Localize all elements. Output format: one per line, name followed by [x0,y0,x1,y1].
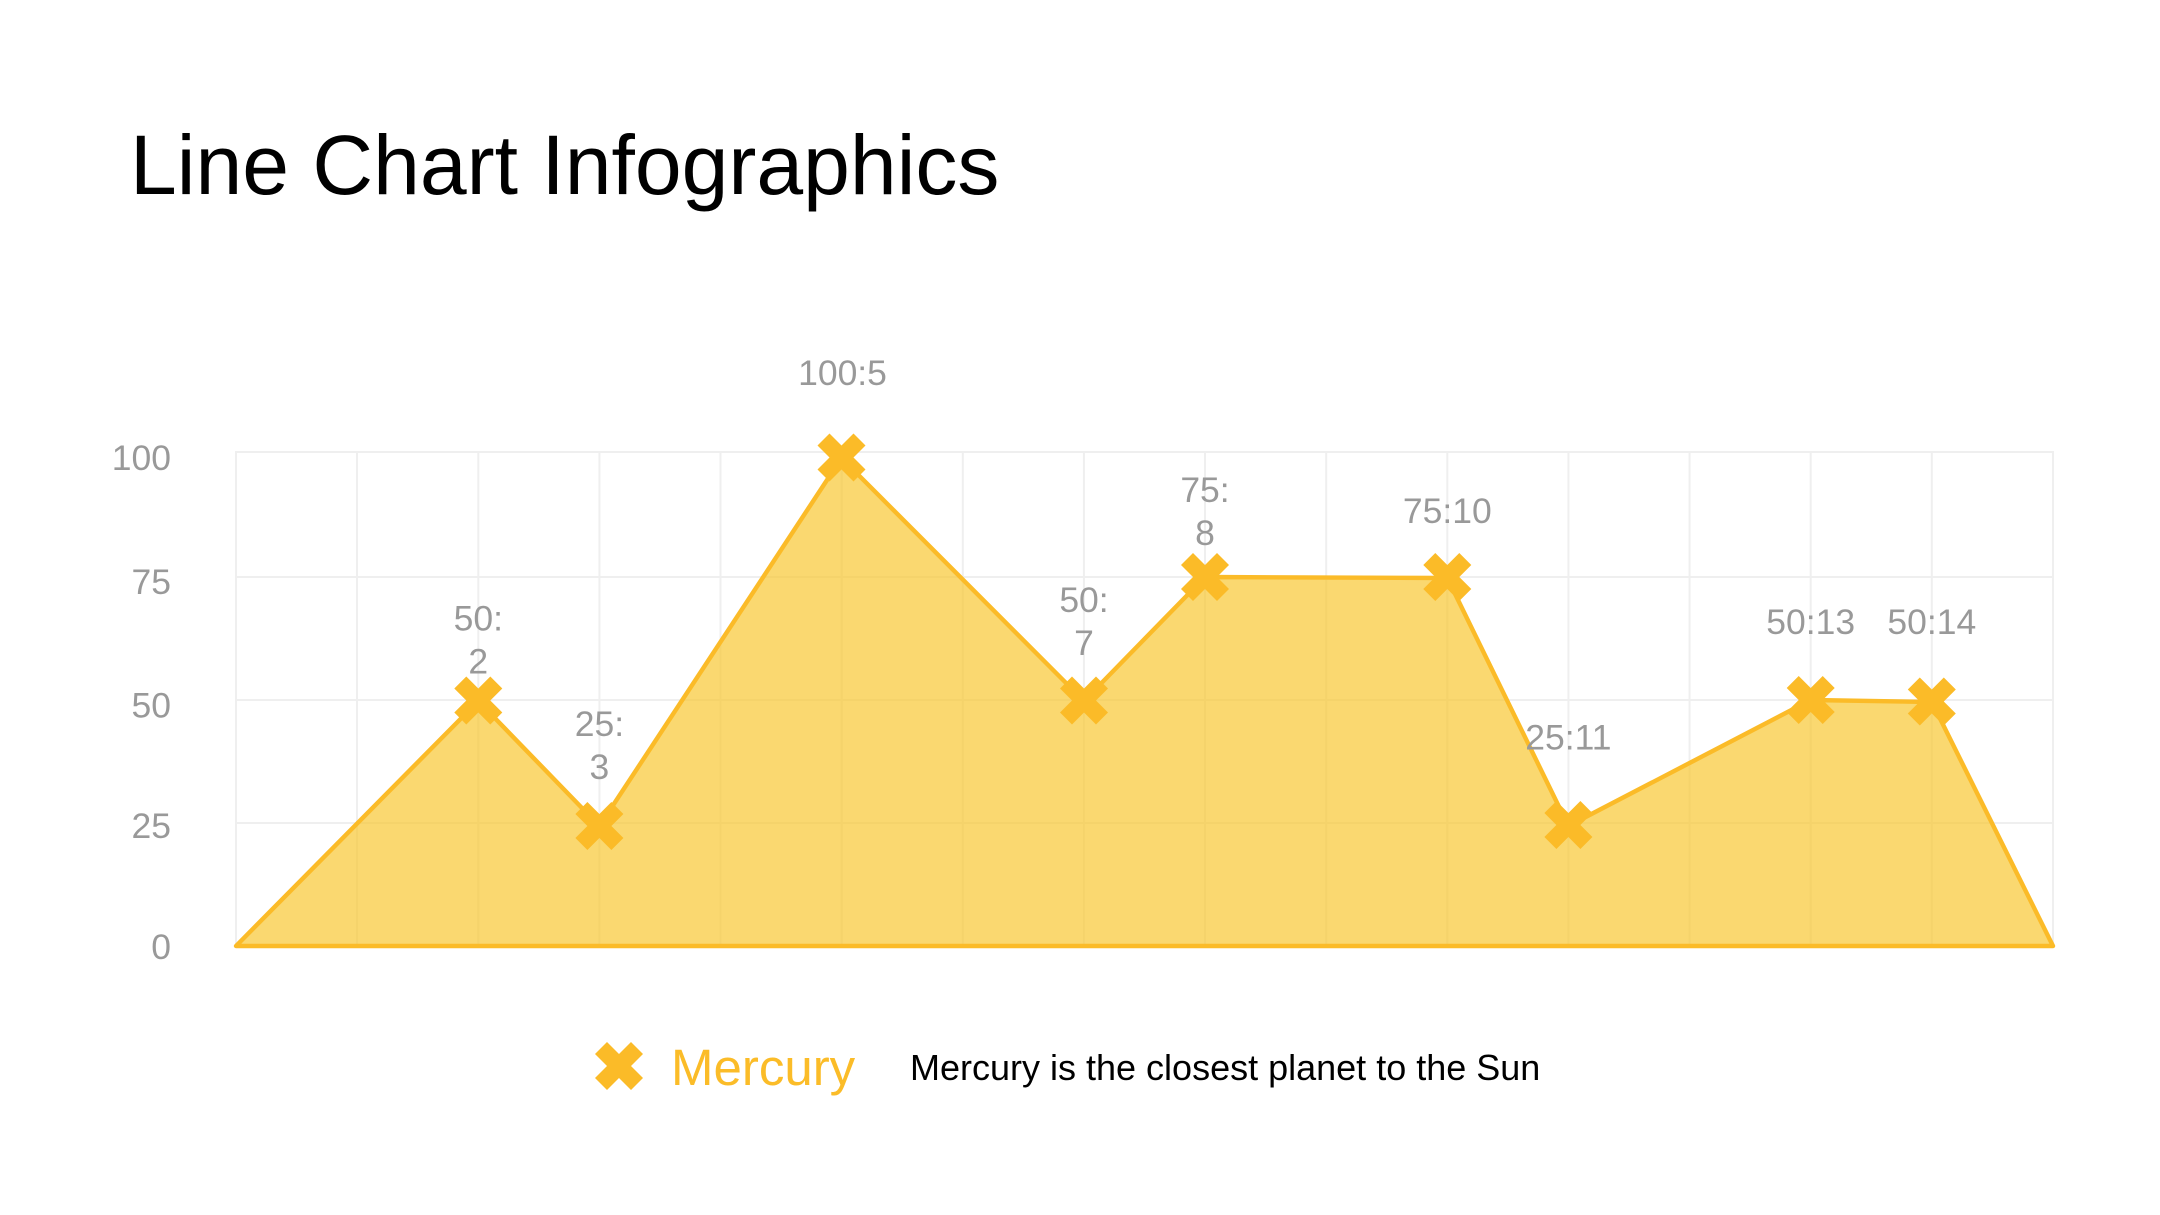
legend label: Mercury [671,1039,856,1096]
y axis labels: 50 [132,686,171,726]
legend marker [595,1042,643,1090]
data labels: 50:14 [1887,602,1976,642]
title: Line Chart Infographics [130,118,999,212]
y axis labels: 75 [132,562,171,602]
data labels: 3 [590,747,609,787]
data labels: 8 [1195,513,1215,553]
data labels: 75: [1180,470,1230,510]
y axis labels: 100 [112,438,171,478]
data labels: 50: [1059,580,1109,620]
legend description: Mercury is the closest planet to the Sun [910,1047,1540,1088]
data labels: 25: [575,704,624,744]
data labels: 25:11 [1525,718,1612,758]
data markers [454,434,1956,850]
data labels: 7 [1074,623,1094,663]
legend [595,1039,1540,1096]
data labels: 50:13 [1766,602,1855,642]
data labels: 100:5 [798,353,887,393]
y axis labels [112,438,171,967]
area series: Mercury [236,458,2053,946]
data labels: 75:10 [1403,491,1492,531]
data labels: 50: [454,598,503,638]
y axis labels: 0 [151,927,171,967]
chart grid [236,451,2053,947]
line chart [112,353,2053,967]
data labels [454,353,1976,787]
y axis labels: 25 [132,806,171,846]
data labels: 2 [468,642,488,682]
